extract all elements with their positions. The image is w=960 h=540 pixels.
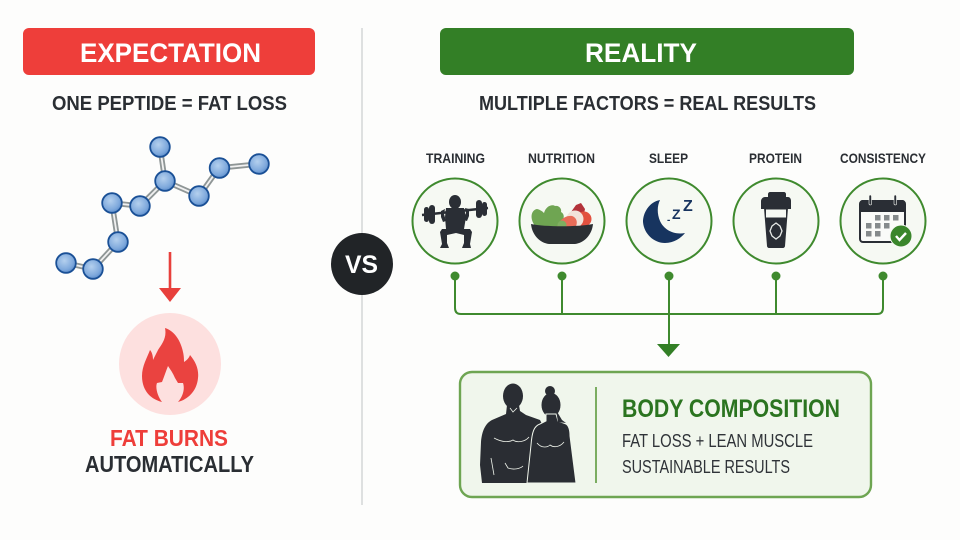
factor: protein	[734, 150, 818, 264]
icon: protein shaker	[761, 192, 791, 248]
center divider	[361, 28, 363, 505]
icon: calendar with check	[860, 195, 912, 247]
text: fat burns automatically: FAT BURNS	[110, 425, 228, 451]
icon: man and woman silhouettes	[480, 384, 576, 483]
factor: nutrition: NUTRITION	[528, 150, 595, 166]
subheading: one peptide: ONE PEPTIDE = FAT LOSS	[52, 93, 287, 115]
panel: body composition	[460, 372, 871, 497]
factor: sleep	[626, 150, 712, 264]
vs badge	[331, 233, 393, 295]
icon: crescent moon with z: Z	[683, 198, 693, 215]
factor: nutrition	[520, 150, 604, 264]
icon: crescent moon with z: -	[667, 215, 670, 226]
factor: consistency: CONSISTENCY	[840, 150, 927, 166]
text: benefits: FAT LOSS + LEAN MUSCLE	[622, 431, 813, 451]
arrow: down to result	[657, 344, 680, 357]
subheading: multiple factors: MULTIPLE FACTORS = REAL RESULTS	[479, 93, 816, 115]
factor: sleep: SLEEP	[649, 150, 688, 166]
text: benefits: SUSTAINABLE RESULTS	[622, 457, 790, 477]
factor: training: TRAINING	[426, 150, 485, 166]
factor: training	[412, 150, 498, 264]
text: benefits	[622, 431, 813, 477]
header: reality: REALITY	[585, 38, 697, 68]
icon: crescent moon with z	[643, 198, 693, 243]
icon: peptide molecule	[56, 137, 269, 279]
header: reality	[440, 28, 854, 75]
icon: flame in pink circle	[119, 313, 221, 415]
text: body composition: BODY COMPOSITION	[622, 395, 840, 423]
header: expectation	[23, 28, 315, 75]
header: expectation: EXPECTATION	[80, 38, 261, 68]
text: fat burns automatically: AUTOMATICALLY	[85, 451, 254, 477]
vs badge: VS	[345, 251, 378, 279]
factor: consistency	[840, 150, 927, 264]
arrow: peptide to fat burn	[159, 252, 181, 302]
icon: salad bowl	[531, 203, 593, 244]
factor: protein: PROTEIN	[749, 150, 802, 166]
text: fat burns automatically	[85, 425, 254, 477]
connectors: factors to body composition	[450, 272, 888, 357]
icon: crescent moon with z: Z	[672, 206, 681, 222]
icon: squat with barbell	[422, 195, 488, 248]
